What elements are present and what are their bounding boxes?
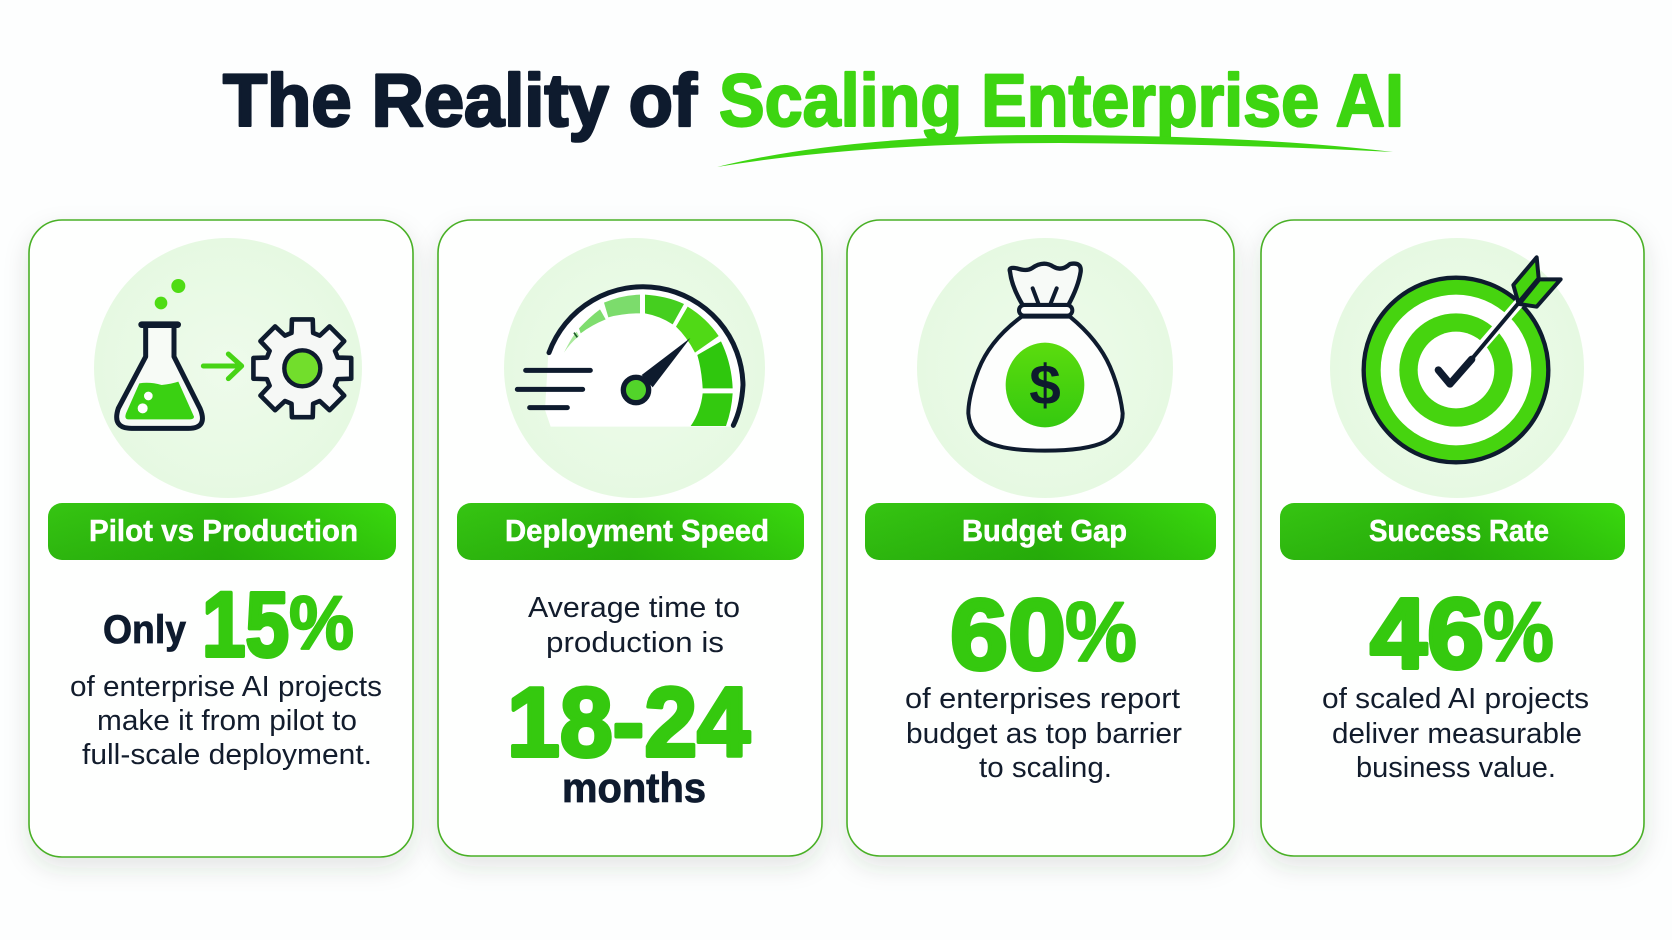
stat: 46% xyxy=(1370,578,1554,690)
pill heading: Success Rate xyxy=(1369,513,1549,548)
stat: 60% xyxy=(950,579,1137,691)
panel: budget gap xyxy=(847,220,1234,856)
stat: only 15% xyxy=(103,574,354,676)
intro text xyxy=(528,592,740,659)
pill heading: Budget Gap xyxy=(962,513,1127,548)
title: Scaling Enterprise AI xyxy=(719,59,1404,142)
description: business value. xyxy=(1356,752,1556,784)
icon circle xyxy=(1330,238,1584,498)
stat: only 15%: Only xyxy=(103,608,187,652)
panel: pilot vs production xyxy=(29,220,413,857)
pill heading xyxy=(457,503,804,560)
icon: money bag: $ xyxy=(1029,354,1061,417)
icon: flask, arrow and gear xyxy=(117,279,351,428)
description: full-scale deployment. xyxy=(82,739,372,771)
stat: only 15%: % xyxy=(289,581,354,666)
description: of enterprises report xyxy=(905,683,1180,715)
icon circle xyxy=(94,238,362,498)
title underline swoosh xyxy=(717,135,1393,167)
description: budget as top barrier xyxy=(906,718,1182,750)
description: deliver measurable xyxy=(1332,718,1582,750)
intro text: production is xyxy=(546,627,724,659)
pill heading: Deployment Speed xyxy=(505,513,769,548)
intro text: Average time to xyxy=(528,592,740,624)
title xyxy=(223,59,1404,142)
icon circle xyxy=(917,238,1173,498)
pill heading: Pilot vs Production xyxy=(89,513,358,548)
description xyxy=(1322,683,1589,784)
icon: target with arrow xyxy=(1364,257,1561,462)
description: to scaling. xyxy=(979,752,1112,784)
pill heading xyxy=(865,503,1216,560)
stat: 60%: % xyxy=(1065,585,1137,679)
pill heading xyxy=(1280,503,1625,560)
stat: only 15%: 15 xyxy=(202,574,289,676)
description: of scaled AI projects xyxy=(1322,683,1589,715)
pill heading xyxy=(48,503,396,560)
stat: 60%: 60 xyxy=(950,579,1066,691)
description: of enterprise AI projects xyxy=(70,671,382,703)
title: The Reality of xyxy=(223,59,697,142)
icon: money bag xyxy=(968,264,1123,451)
icon: speedometer xyxy=(517,286,743,427)
description xyxy=(905,683,1182,784)
panel: success rate xyxy=(1261,220,1644,856)
stat: 18-24: 18-24 xyxy=(507,667,750,777)
panel: deployment speed xyxy=(438,220,822,856)
description: make it from pilot to xyxy=(97,705,357,737)
icon circle xyxy=(504,238,765,498)
description xyxy=(70,671,382,771)
stat: 46%: 46 xyxy=(1370,578,1484,690)
stat: 46%: % xyxy=(1483,585,1554,679)
unit: months: months xyxy=(562,764,706,811)
